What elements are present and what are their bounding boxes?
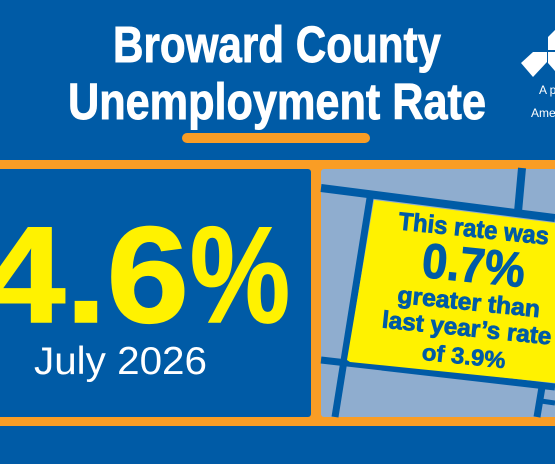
panel: map comparison xyxy=(321,168,555,417)
title: Unemployment Rate xyxy=(68,73,486,130)
yellow callout block xyxy=(347,200,555,383)
rate value xyxy=(0,199,290,352)
map roads xyxy=(321,168,555,417)
rate value: % xyxy=(190,199,290,352)
title underline xyxy=(182,133,370,143)
map background xyxy=(321,169,555,417)
month label: July 2026 xyxy=(34,340,207,383)
icon: logo mark xyxy=(521,30,555,77)
orange band xyxy=(0,160,555,426)
logo text: Ame xyxy=(531,106,555,120)
callout text: greater than xyxy=(396,282,541,323)
title xyxy=(68,16,486,130)
callout text: This rate was xyxy=(397,207,550,251)
callout text: of 3.9% xyxy=(421,339,507,373)
panel: current rate xyxy=(0,169,311,417)
callout text xyxy=(381,207,553,373)
logo xyxy=(521,30,555,120)
logo text xyxy=(531,83,555,120)
callout text: last year’s rate xyxy=(381,307,553,351)
title: Broward County xyxy=(113,16,442,73)
callout text: 0.7% xyxy=(420,234,528,298)
